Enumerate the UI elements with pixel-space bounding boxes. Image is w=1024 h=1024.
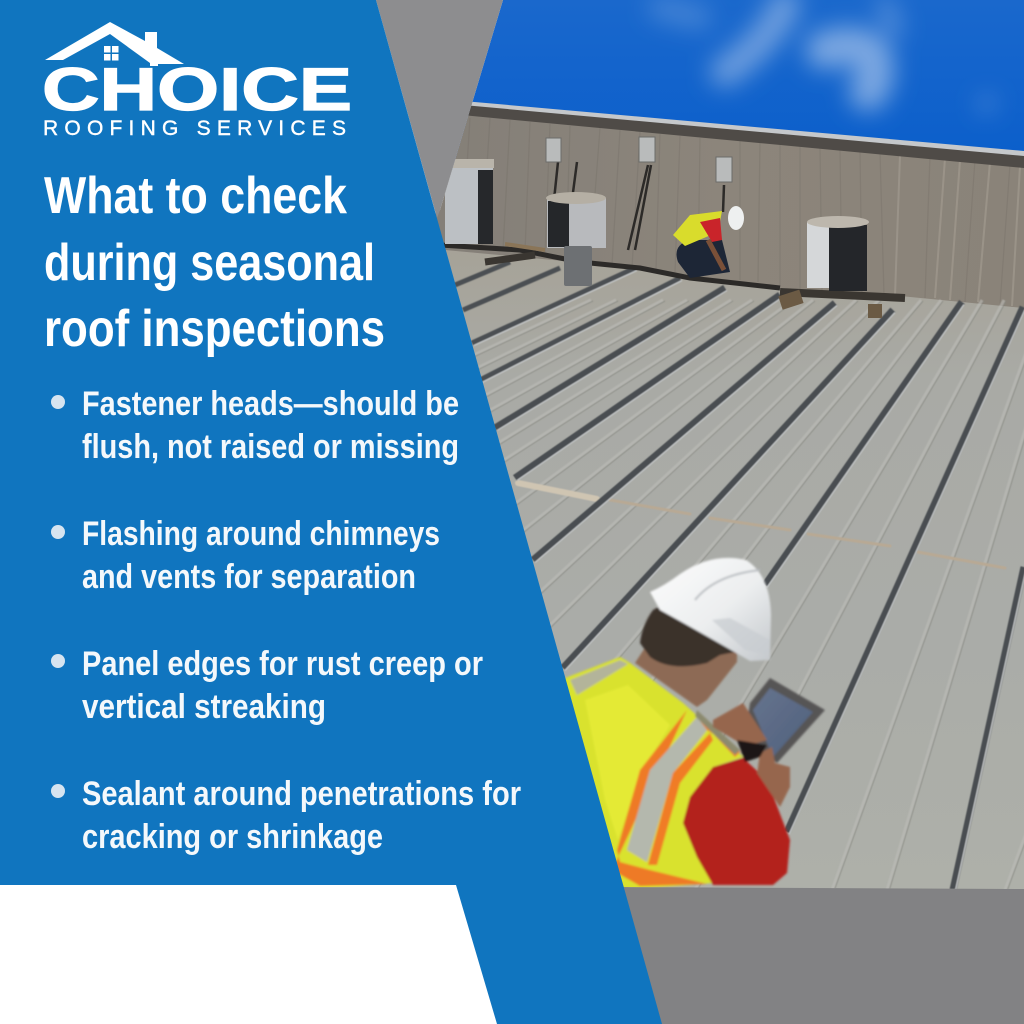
reflective band xyxy=(627,717,707,862)
heading xyxy=(44,167,385,358)
tagline: ROOFING SERVICES xyxy=(43,117,346,140)
small utility box xyxy=(564,246,592,286)
hair xyxy=(640,606,735,666)
panel: blue content panel xyxy=(0,0,662,1024)
heading: during seasonal xyxy=(44,234,375,292)
bullet: panel edges: Panel edges for rust creep or xyxy=(82,645,483,683)
photo: roof inspection xyxy=(436,0,1024,889)
bullet: sealant: Sealant around penetrations for xyxy=(82,775,521,813)
bullet: panel edges xyxy=(51,645,483,726)
red shirt xyxy=(683,758,790,885)
bullet: flashing: Flashing around chimneys xyxy=(82,515,440,553)
reflective strap xyxy=(570,660,628,695)
roof deck xyxy=(420,245,1024,900)
tablet xyxy=(745,678,825,763)
logo: Choice Roofing Services xyxy=(42,22,352,140)
background worker xyxy=(673,206,744,278)
bullet: fastener heads xyxy=(51,385,459,466)
AC unit right xyxy=(807,216,869,291)
AC unit left xyxy=(445,159,494,244)
dark cables and timbers along wall xyxy=(440,162,905,298)
panel: grey upper triangle xyxy=(376,0,503,218)
panel seam rust line xyxy=(518,483,1005,568)
electrical disconnect boxes xyxy=(546,137,732,182)
hi-vis vest xyxy=(560,657,743,892)
bullet: flashing xyxy=(51,515,440,596)
wordmark: CHOICE xyxy=(42,56,352,123)
orange trim xyxy=(612,710,707,886)
bullet: panel edges: vertical streaking xyxy=(82,688,326,726)
standing seam rails xyxy=(455,262,1024,892)
bullet: sealant xyxy=(51,775,521,856)
parapet wall xyxy=(430,98,1024,308)
timber rack xyxy=(778,290,882,318)
sky xyxy=(430,0,1024,170)
white hard hat xyxy=(650,558,771,661)
bullet: fastener heads: flush, not raised or missing xyxy=(82,428,459,466)
heading: roof inspections xyxy=(44,300,385,358)
bullet: fastener heads: Fastener heads—should be xyxy=(82,385,459,423)
AC unit middle xyxy=(546,192,606,248)
bullet: flashing: and vents for separation xyxy=(82,558,416,596)
hands xyxy=(713,703,790,807)
panel: grey lower band xyxy=(615,887,1024,1024)
panel ribs xyxy=(475,299,1024,889)
skin and neck xyxy=(635,640,737,707)
icon: house roof xyxy=(45,22,184,66)
bullet: sealant: cracking or shrinkage xyxy=(82,818,383,856)
foreground worker xyxy=(560,558,825,892)
heading: What to check xyxy=(44,167,347,225)
